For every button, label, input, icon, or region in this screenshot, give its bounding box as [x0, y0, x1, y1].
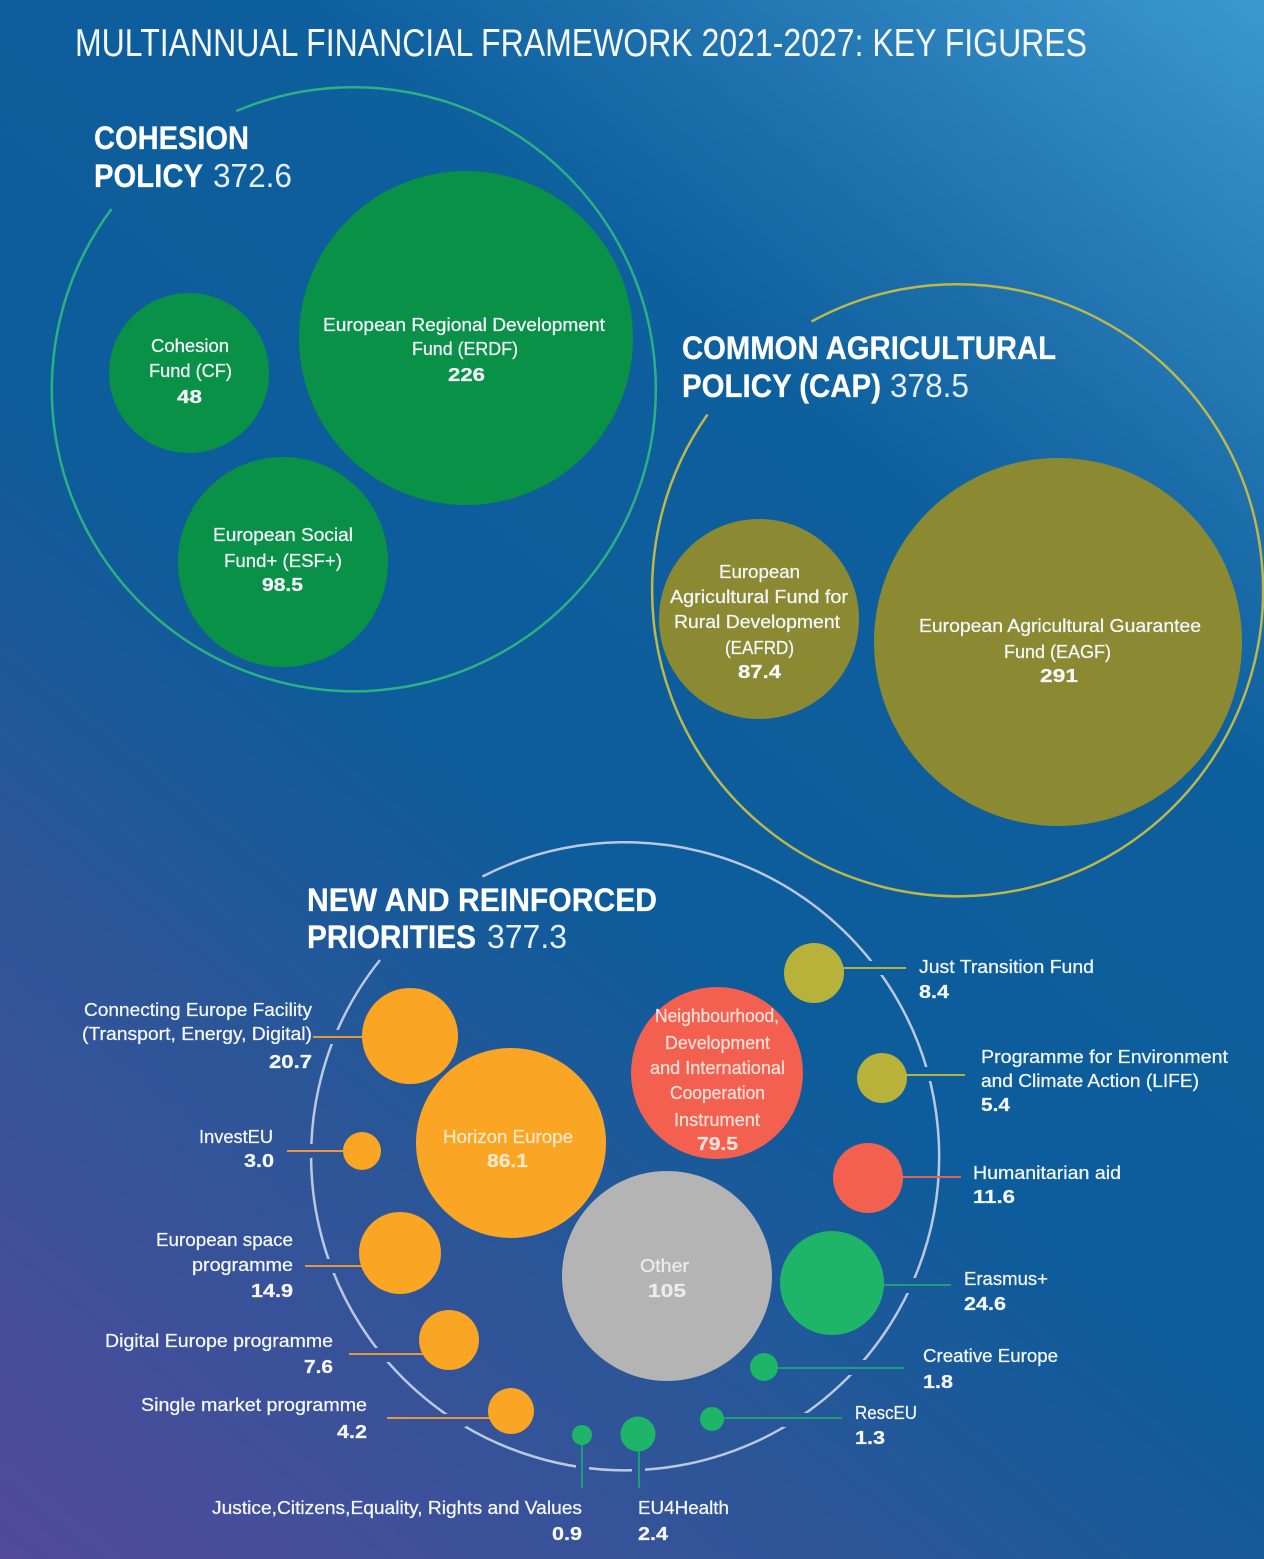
item: LIFE programme	[857, 1047, 1228, 1115]
bubble: Neighbourhood, Development and International Cooperation Instrument: Instrument	[674, 1110, 760, 1130]
bubble: EAFRD: (EAFRD)	[725, 638, 794, 658]
priorities heading: NEW AND REINFORCED	[307, 882, 657, 918]
bubble: European Regional Development Fund: 226	[448, 365, 485, 385]
item: Digital Europe programme: Digital Europe programme	[105, 1331, 333, 1351]
panel: new and reinforced priorities	[82, 842, 1228, 1544]
cohesion outline ring	[52, 87, 656, 691]
bubble: EAFRD: European	[719, 562, 800, 582]
CAP heading: COMMON AGRICULTURAL	[682, 330, 1056, 366]
item: RescEU	[700, 1403, 917, 1448]
CAP heading	[682, 330, 1056, 404]
bubble: Horizon Europe: 86.1	[487, 1151, 528, 1171]
bubble: EAGF: Fund (EAGF)	[1004, 642, 1111, 662]
bubble: Cohesion Fund: Fund (CF)	[149, 361, 232, 381]
item: Connecting Europe Facility: 20.7	[269, 1052, 312, 1072]
bubble: European Social Fund+: 98.5	[262, 575, 303, 595]
item: Creative Europe	[750, 1346, 1058, 1392]
bubble: Neighbourhood, Development and International Cooperation Instrument: Neighbourhood,	[655, 1006, 779, 1026]
item: Erasmus+: Erasmus+	[964, 1269, 1048, 1289]
item: European space programme: European space	[156, 1230, 293, 1250]
item: LIFE programme: and Climate Action (LIFE)	[981, 1071, 1199, 1091]
bubble: European Social Fund+: Fund+ (ESF+)	[224, 551, 342, 571]
CAP heading: 378.5	[890, 367, 969, 404]
item: InvestEU	[199, 1127, 381, 1171]
bubble: Neighbourhood, Development and International Cooperation Instrument	[631, 987, 803, 1159]
item: EU4Health: EU4Health	[638, 1498, 729, 1518]
bubble: EAFRD: 87.4	[738, 662, 781, 682]
item: Humanitarian aid: Humanitarian aid	[973, 1163, 1121, 1183]
bubble: Neighbourhood, Development and International Cooperation Instrument: 79.5	[697, 1134, 738, 1154]
item: Connecting Europe Facility	[82, 988, 458, 1084]
bubble: Other	[562, 1171, 772, 1381]
item: RescEU: 1.3	[855, 1428, 885, 1448]
item: Justice, Citizens, Equality, Rights and Values: Justice,Citizens,Equality, Rights and Values	[212, 1498, 582, 1518]
item: Humanitarian aid: 11.6	[973, 1187, 1015, 1207]
bubble: EAGF: European Agricultural Guarantee	[919, 616, 1201, 636]
item: Humanitarian aid	[833, 1143, 1121, 1213]
cohesion heading: 372.6	[213, 157, 292, 194]
bubble: EAGF	[874, 458, 1242, 826]
item: Creative Europe: 1.8	[923, 1372, 953, 1392]
cohesion heading: COHESION	[94, 120, 249, 156]
item: Just Transition Fund: Just Transition Fund	[919, 957, 1094, 977]
item: Single market programme	[141, 1388, 534, 1442]
item: Just Transition Fund	[784, 943, 1094, 1003]
bubble: Other: Other	[640, 1256, 689, 1276]
item: Erasmus+	[780, 1231, 1048, 1335]
bubble: Neighbourhood, Development and International Cooperation Instrument: and International	[650, 1058, 785, 1078]
bubble: Cohesion Fund: Cohesion	[151, 336, 229, 356]
item: European space programme: 14.9	[251, 1281, 293, 1301]
item: InvestEU: InvestEU	[199, 1127, 273, 1147]
bubble: Neighbourhood, Development and International Cooperation Instrument: Development	[665, 1033, 770, 1053]
item: European space programme	[156, 1212, 441, 1301]
item: European space programme: programme	[192, 1255, 293, 1275]
priorities heading	[307, 882, 657, 955]
bubble: Neighbourhood, Development and International Cooperation Instrument: Cooperation	[670, 1083, 765, 1103]
bubble: EAFRD: Agricultural Fund for	[670, 587, 848, 607]
item: LIFE programme: 5.4	[981, 1095, 1010, 1115]
item: Digital Europe programme	[105, 1310, 479, 1377]
bubble: Cohesion Fund	[109, 293, 269, 453]
item: Erasmus+: 24.6	[964, 1294, 1006, 1314]
bubble: European Regional Development Fund: Fund (ERDF)	[412, 339, 518, 359]
item: EU4Health: 2.4	[638, 1524, 668, 1544]
item: Connecting Europe Facility: Connecting Europe Facility	[84, 1000, 312, 1020]
bubble: European Social Fund+: European Social	[213, 525, 353, 545]
CAP heading: POLICY (CAP)	[682, 368, 881, 404]
bubble: Horizon Europe: Horizon Europe	[443, 1127, 573, 1147]
bubble: EAGF: 291	[1040, 666, 1078, 686]
bubble: EAFRD: Rural Development	[674, 612, 840, 632]
item: LIFE programme: Programme for Environment	[981, 1047, 1228, 1067]
item: EU4Health	[620, 1416, 729, 1544]
item: InvestEU: 3.0	[244, 1151, 274, 1171]
item: RescEU: RescEU	[855, 1403, 917, 1423]
bubble: Horizon Europe	[416, 1048, 606, 1238]
priorities outline ring	[311, 842, 939, 1470]
item: Single market programme: Single market programme	[141, 1395, 367, 1415]
CAP outline ring	[652, 284, 1263, 896]
bubble: European Regional Development Fund	[299, 171, 633, 505]
item: Single market programme: 4.2	[337, 1422, 367, 1442]
bubble: European Social Fund+	[178, 457, 388, 667]
priorities heading: PRIORITIES	[307, 919, 476, 955]
priorities heading: 377.3	[487, 918, 567, 955]
bubble: European Regional Development Fund: European Regional Development	[323, 315, 605, 335]
bubble: Other: 105	[648, 1281, 686, 1301]
cohesion heading: POLICY	[94, 158, 203, 194]
item: Digital Europe programme: 7.6	[304, 1357, 333, 1377]
bubble: EAFRD	[659, 519, 859, 719]
panel: cohesion policy	[52, 87, 656, 691]
item: Just Transition Fund: 8.4	[919, 982, 949, 1002]
item: Connecting Europe Facility: (Transport, Energy, Digital)	[82, 1024, 312, 1044]
cohesion heading	[94, 120, 292, 194]
panel: common agricultural policy	[652, 284, 1263, 896]
item: Justice, Citizens, Equality, Rights and Values: 0.9	[552, 1524, 582, 1544]
bubble: Cohesion Fund: 48	[177, 387, 202, 407]
item: Justice, Citizens, Equality, Rights and Values	[212, 1425, 592, 1544]
item: Creative Europe: Creative Europe	[923, 1346, 1058, 1366]
